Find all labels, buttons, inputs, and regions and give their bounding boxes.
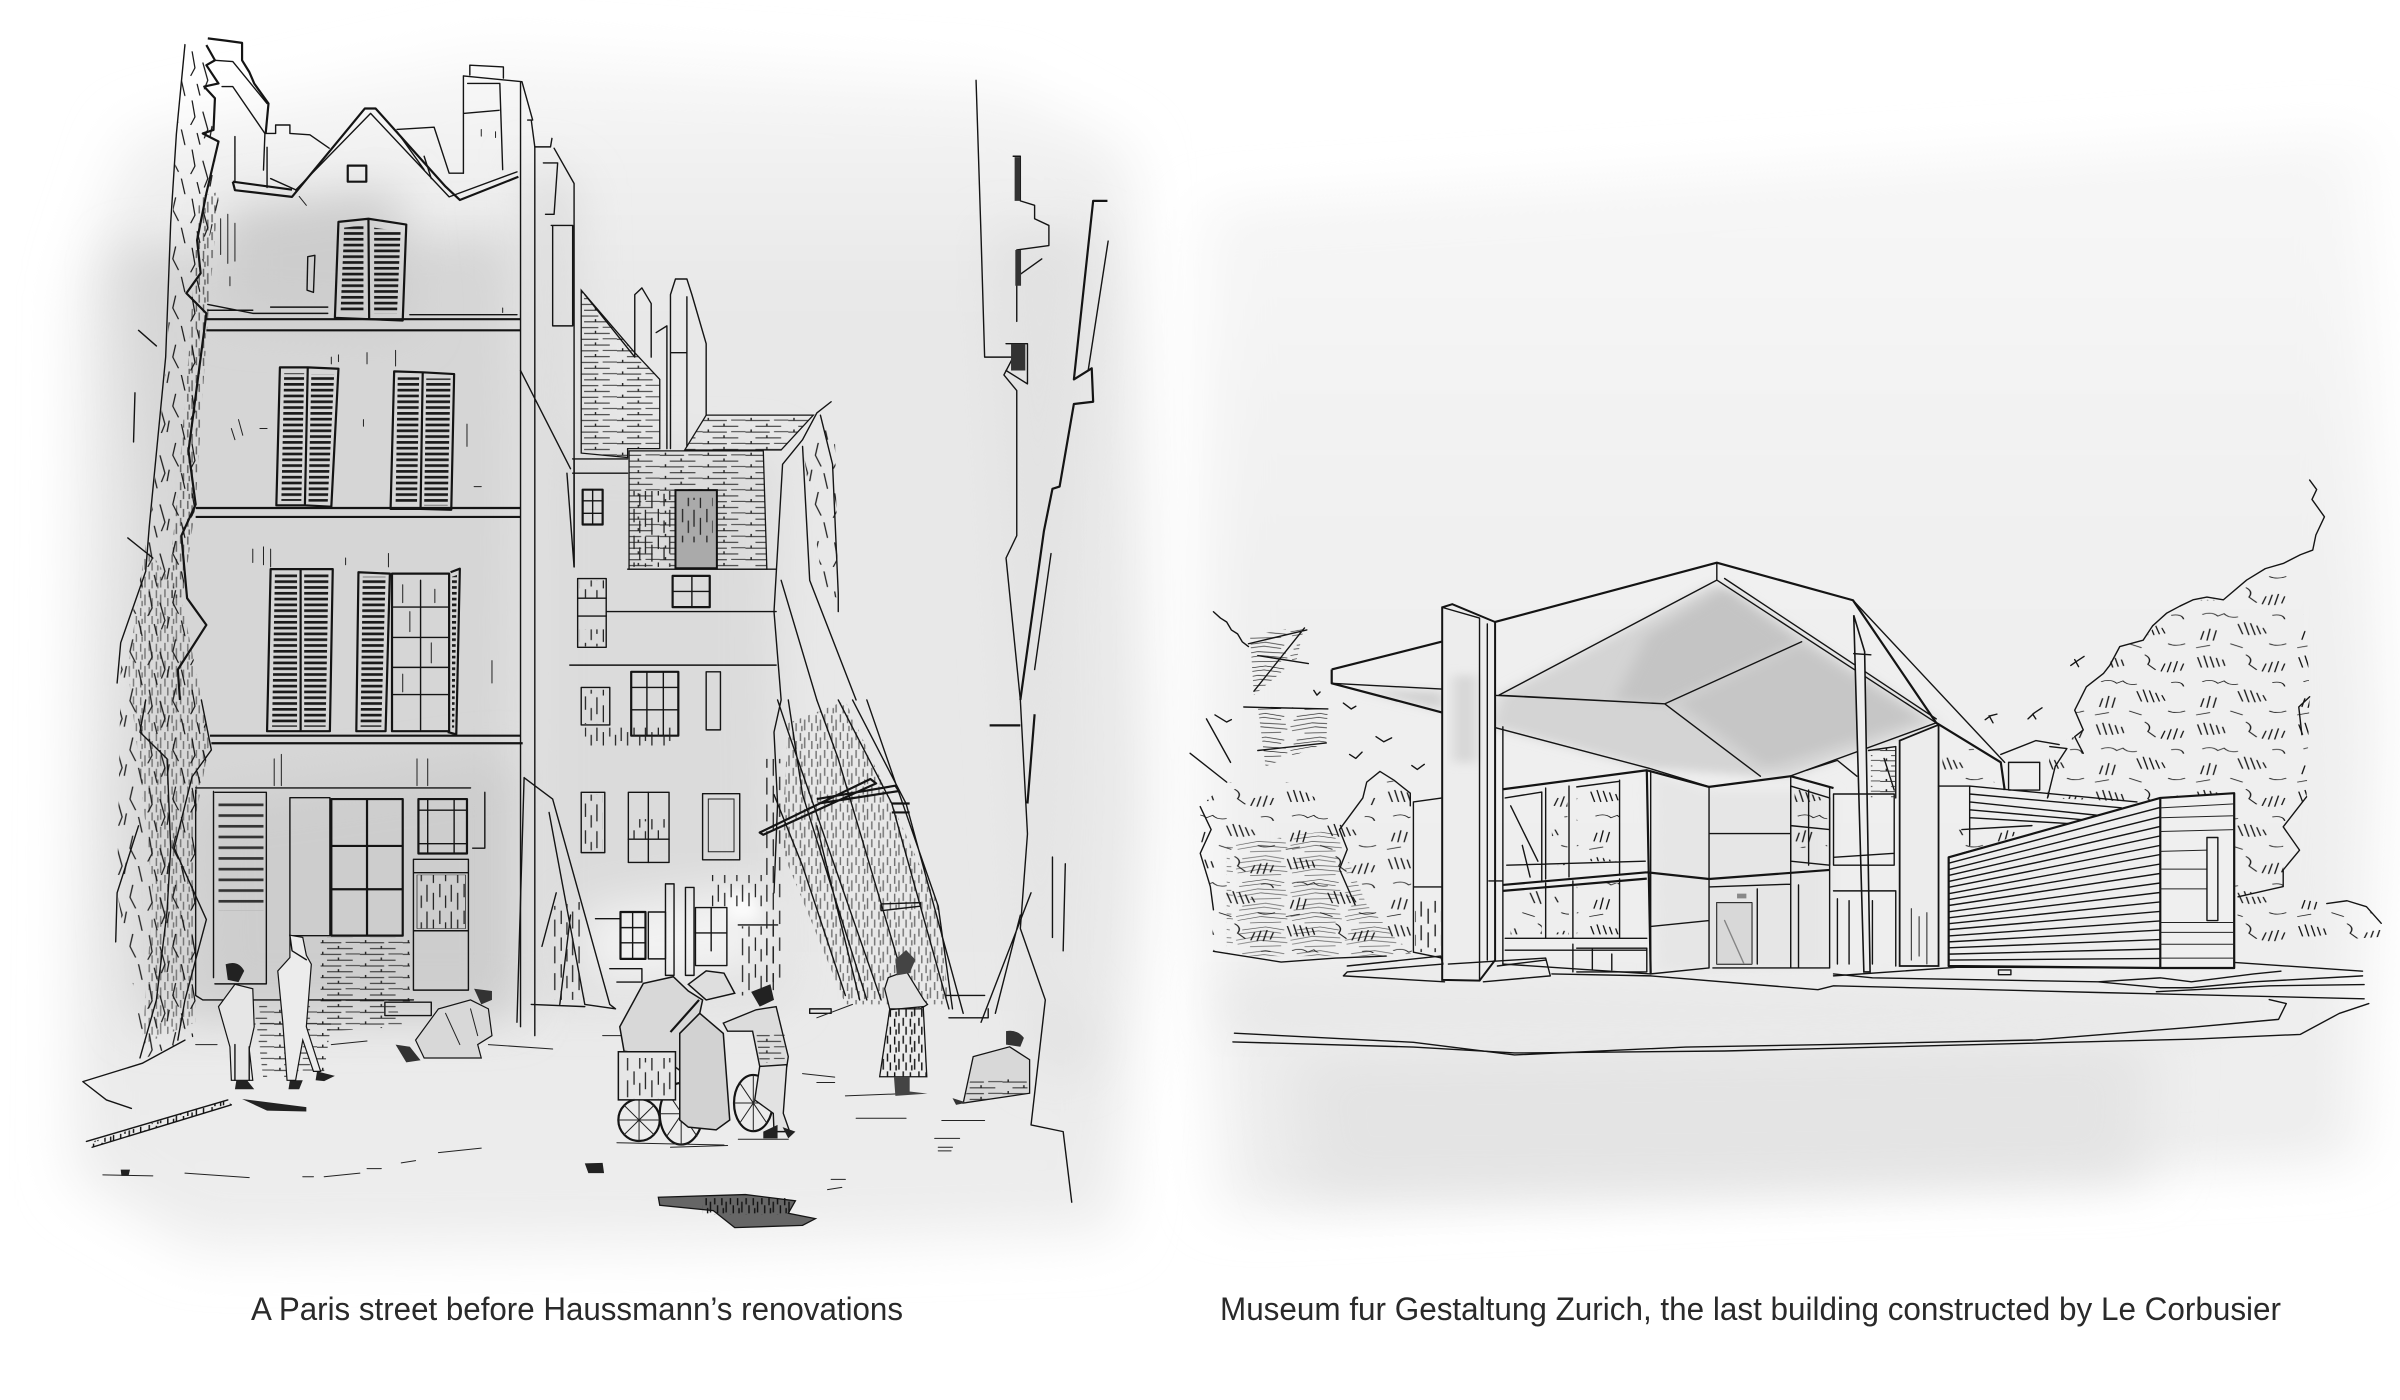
- panel: Paris street illustration: [74, 38, 1149, 1250]
- far right wall edges: [976, 80, 1108, 1202]
- figure: crouching person: [396, 989, 492, 1062]
- figures: children at left: [219, 935, 335, 1089]
- scaffolding and ladders: [760, 402, 1031, 1022]
- watercolor wash: museum scene: [1203, 134, 2378, 1213]
- second floor shutters: [276, 367, 454, 510]
- birds: [1215, 656, 2084, 769]
- left trees: [1190, 612, 1413, 962]
- ruined left wall: [83, 38, 268, 1147]
- glass facade block: [1503, 770, 1834, 974]
- central panels and entrance: [1651, 771, 1830, 974]
- thin mast and rear structure: [1806, 615, 1896, 972]
- paving, steps and ground lines: [1233, 956, 2369, 1055]
- pothole puddle: [658, 1195, 815, 1228]
- caption: Museum fur Gestaltung: Museum fur Gestaltung Zurich, the last building constructed by Le Corbusier: [1220, 1291, 2281, 1327]
- right tree: [2001, 480, 2383, 947]
- top floor shutters: [335, 219, 406, 321]
- caption: Paris street: A Paris street before Haussmann’s renovations: [251, 1291, 903, 1327]
- third floor shutters and open window: [267, 569, 460, 734]
- ground floor doors and windows: [196, 788, 485, 1031]
- upper terrace: [1939, 743, 2137, 853]
- back building roofs and chimneys: [570, 279, 813, 665]
- small left wing: [1413, 798, 1503, 958]
- back building windows: [578, 490, 781, 995]
- figure: seated person by wall: [952, 1031, 1030, 1105]
- rubble on ground: [103, 1004, 985, 1190]
- figure: standing woman: [880, 950, 928, 1096]
- slatted timber wall: [1949, 793, 2234, 968]
- floor bands: [196, 304, 523, 743]
- panel: Museum fur Gestaltung illustration: [1190, 134, 2383, 1213]
- facade scratch marks: [221, 129, 503, 786]
- roof canopy: [1332, 563, 2005, 790]
- right concrete column: [1900, 725, 1939, 966]
- main building outline and roof: [233, 65, 574, 1036]
- leaning planks against building: [517, 778, 615, 1022]
- figure: cart with bundled sacks: [617, 971, 795, 1147]
- watercolor wash: Paris scene: [74, 54, 1149, 1250]
- left concrete column: [1442, 604, 1503, 981]
